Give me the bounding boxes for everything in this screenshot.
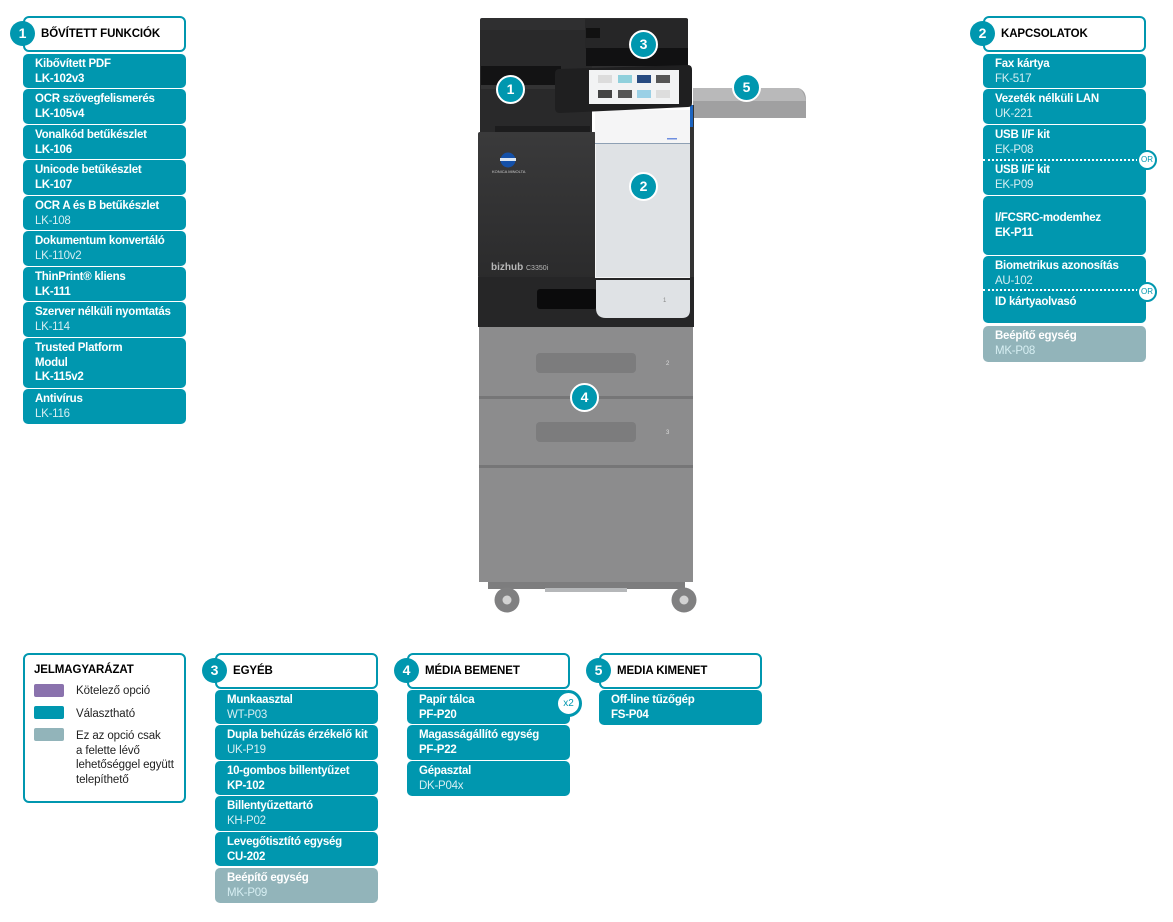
item: I/FCSRC-modemhez <box>995 212 1101 224</box>
label: lehetőséggel együtt <box>76 759 174 771</box>
item: Trusted Platform <box>35 342 122 354</box>
item <box>23 160 186 195</box>
marker 2 <box>629 172 658 201</box>
x2 badge <box>555 690 582 717</box>
item: Dupla behúzás érzékelő kit <box>227 729 368 741</box>
item: Biometrikus azonosítás <box>995 260 1119 272</box>
panel: média kimenet <box>586 653 762 725</box>
heading <box>23 16 186 52</box>
item <box>983 326 1146 362</box>
number badge 1 <box>10 21 35 46</box>
number badge 1: 1 <box>19 25 26 41</box>
paper cabinets: 3 <box>666 430 670 436</box>
swatch: mandatory <box>34 684 64 697</box>
item: PF-P22 <box>419 744 456 756</box>
item <box>215 868 378 903</box>
item: LK-114 <box>35 320 70 332</box>
item: FS-P04 <box>611 708 648 720</box>
item <box>407 690 570 724</box>
item <box>983 196 1146 255</box>
number badge 4: 4 <box>403 662 410 678</box>
marker 3 <box>629 30 658 59</box>
item: OCR A és B betűkészlet <box>35 200 159 212</box>
item: LK-115v2 <box>35 371 84 383</box>
item <box>983 54 1146 88</box>
dotted divider with OR <box>983 159 1138 161</box>
label: Kötelező opció <box>76 685 150 697</box>
item <box>215 725 378 760</box>
swatch: optional <box>34 706 64 719</box>
item: LK-106 <box>35 144 72 156</box>
label <box>76 730 174 786</box>
or badge: OR <box>1141 155 1153 164</box>
number badge 3 <box>202 658 227 683</box>
item: Kibővített PDF <box>35 58 111 70</box>
Konica Minolta logo: KONICA MINOLTA <box>492 169 526 174</box>
heading: BŐVÍTETT FUNKCIÓK <box>41 28 160 40</box>
model name: bizhub C3350i <box>491 262 549 273</box>
item <box>23 89 186 124</box>
item: DK-P04x <box>419 780 463 792</box>
item: OCR szövegfelismerés <box>35 93 155 105</box>
right front panels <box>595 105 694 318</box>
paper cabinets: 2 <box>666 361 670 367</box>
number badge 2 <box>970 21 995 46</box>
number badge 2: 2 <box>979 25 986 41</box>
scanner and upper body <box>480 18 688 132</box>
panel: bővített funkciók <box>10 16 186 424</box>
main body <box>478 132 694 327</box>
item: Dokumentum konvertáló <box>35 235 165 247</box>
item: Beépítő egység <box>227 872 308 884</box>
wheels <box>494 588 696 612</box>
panel: egyéb <box>202 653 378 903</box>
swatch: conditional <box>34 728 64 741</box>
printer illustration <box>478 18 806 612</box>
label: Ez az opció csak <box>76 730 161 742</box>
item <box>23 196 186 230</box>
heading <box>215 653 378 689</box>
number badge 5 <box>586 658 611 683</box>
heading <box>983 16 1146 52</box>
item: LK-107 <box>35 178 72 190</box>
item: LK-108 <box>35 214 71 226</box>
item: Munkaasztal <box>227 694 293 706</box>
item <box>983 89 1146 124</box>
item: LK-110v2 <box>35 250 81 262</box>
number badge 3: 3 <box>211 662 218 678</box>
heading: KAPCSOLATOK <box>1001 28 1088 40</box>
item: ThinPrint® kliens <box>35 271 126 283</box>
item: Modul <box>35 356 68 368</box>
item: EK-P09 <box>995 178 1033 190</box>
item <box>983 125 1146 195</box>
item <box>23 267 186 301</box>
marker 5 <box>732 73 761 102</box>
item: Gépasztal <box>419 765 471 777</box>
finisher tray <box>693 88 806 118</box>
item <box>215 690 378 724</box>
item: Antivírus <box>35 393 83 405</box>
item: ID kártyaolvasó <box>995 296 1076 308</box>
number badge 5: 5 <box>595 662 602 678</box>
item: USB I/F kit <box>995 164 1050 176</box>
item: FK-517 <box>995 72 1031 84</box>
item: KP-102 <box>227 780 264 792</box>
Konica Minolta logo <box>492 152 526 174</box>
item: Unicode betűkészlet <box>35 164 141 176</box>
or badge: OR <box>1141 287 1153 296</box>
item <box>215 832 378 866</box>
paper cabinets <box>479 327 696 612</box>
item: USB I/F kit <box>995 129 1050 141</box>
item: Magasságállító egység <box>419 729 539 741</box>
item <box>23 302 186 337</box>
item: UK-P19 <box>227 744 266 756</box>
or badge <box>1137 150 1157 170</box>
marker 4 <box>570 383 599 412</box>
marker 1: 1 <box>507 81 514 97</box>
label: telepíthető <box>76 774 129 786</box>
or badge <box>1137 282 1157 302</box>
item: UK-221 <box>995 108 1032 120</box>
item: Papír tálca <box>419 694 474 706</box>
marker 5: 5 <box>743 79 750 95</box>
item: PF-P20 <box>419 708 456 720</box>
marker 3: 3 <box>640 36 647 52</box>
item <box>215 761 378 795</box>
item <box>23 389 186 424</box>
x2 badge: x2 <box>563 698 574 709</box>
heading: EGYÉB <box>233 665 273 677</box>
marker 1 <box>496 75 525 104</box>
item: LK-116 <box>35 408 70 420</box>
item: MK-P09 <box>227 886 267 898</box>
item: Vonalkód betűkészlet <box>35 129 147 141</box>
item: Fax kártya <box>995 58 1049 70</box>
item: Billentyűzettartó <box>227 800 313 812</box>
item: WT-P03 <box>227 708 267 720</box>
legend title: JELMAGYARÁZAT <box>34 664 134 676</box>
right front panels: 1 <box>663 298 667 304</box>
panel: legend <box>23 653 186 803</box>
item: Vezeték nélküli LAN <box>995 93 1099 105</box>
item <box>23 125 186 159</box>
item <box>215 796 378 831</box>
item <box>23 231 186 266</box>
item <box>599 690 762 725</box>
marker 4: 4 <box>581 389 588 405</box>
heading: MÉDIA BEMENET <box>425 665 520 677</box>
heading: MEDIA KIMENET <box>617 665 707 677</box>
item: Off-line tűzőgép <box>611 694 695 706</box>
item <box>23 54 186 88</box>
number badge 4 <box>394 658 419 683</box>
item: KH-P02 <box>227 814 266 826</box>
item: Beépítő egység <box>995 330 1076 342</box>
item: 10-gombos billentyűzet <box>227 765 349 777</box>
item: LK-102v3 <box>35 72 84 84</box>
marker 2: 2 <box>640 178 647 194</box>
heading <box>599 653 762 689</box>
item <box>983 256 1146 323</box>
label: Választható <box>76 708 135 720</box>
item: EK-P08 <box>995 144 1033 156</box>
dotted divider with OR <box>983 289 1138 291</box>
item: AU-102 <box>995 274 1032 286</box>
item <box>407 761 570 796</box>
panel: média bemenet <box>394 653 582 796</box>
item: LK-105v4 <box>35 108 84 120</box>
label: a felette lévő <box>76 744 140 756</box>
panel: kapcsolatok <box>970 16 1157 362</box>
item: MK-P08 <box>995 344 1035 356</box>
item <box>407 725 570 760</box>
item: EK-P11 <box>995 226 1033 238</box>
item: Levegőtisztító egység <box>227 836 342 848</box>
item: LK-111 <box>35 286 71 298</box>
item: Szerver nélküli nyomtatás <box>35 306 171 318</box>
item: CU-202 <box>227 850 265 862</box>
heading <box>407 653 570 689</box>
item <box>23 338 186 388</box>
control panel <box>555 65 692 113</box>
